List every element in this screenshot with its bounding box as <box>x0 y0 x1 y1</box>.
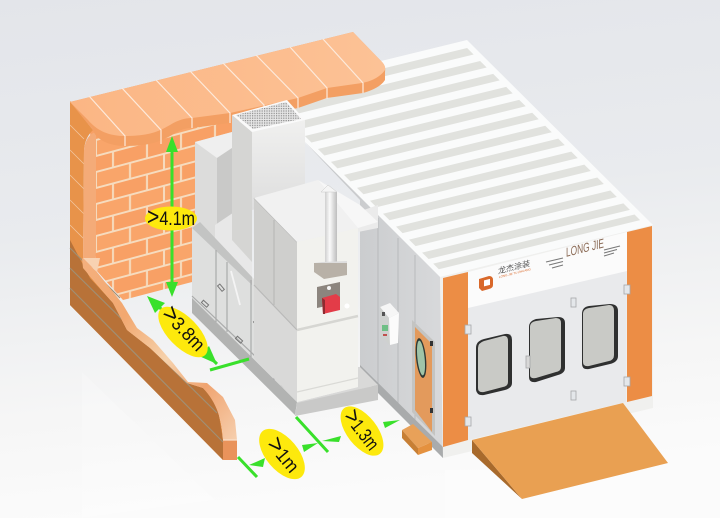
LONG JIE brand: LONG JIE <box>566 236 604 260</box>
red burner <box>322 294 340 314</box>
inner brick face <box>90 110 235 300</box>
control box <box>380 303 399 345</box>
cabinet plinth <box>295 367 378 416</box>
dimension: 1.3m: >1.3m <box>338 403 387 455</box>
pipe base box <box>314 261 347 279</box>
orange right strip <box>627 226 652 402</box>
ramp <box>472 403 668 499</box>
window left <box>476 334 512 395</box>
company logo <box>479 258 531 291</box>
booth front face <box>440 225 653 458</box>
outer wall end <box>70 101 237 460</box>
dimension: 1m: >1m <box>261 431 307 478</box>
LONG JIE brand <box>546 236 620 268</box>
window middle <box>529 317 565 382</box>
booth side wall <box>303 140 443 458</box>
inner return edge <box>83 132 100 272</box>
floor reflections <box>82 372 640 518</box>
dimension: 1.3m <box>322 399 400 463</box>
company logo: LONG JIE TU ZHUANG <box>499 267 531 279</box>
door hinges <box>465 285 630 426</box>
dimension: 1m <box>238 417 328 487</box>
dimension: height 4.1m: >4.1m <box>147 203 195 231</box>
air handling unit <box>192 100 378 416</box>
lower filter cabinet <box>192 222 297 415</box>
dimension: height 4.1m <box>145 136 197 297</box>
brick wall <box>70 101 237 460</box>
rear cabinet <box>195 132 252 285</box>
burner panel <box>317 282 350 314</box>
wooden block <box>402 424 432 455</box>
tall exhaust stack <box>232 100 305 262</box>
exhaust grille <box>236 102 301 129</box>
burner exhaust pipe <box>321 185 337 266</box>
company logo: 龙杰涂装 <box>498 258 530 276</box>
booth side access door <box>412 320 435 436</box>
orange left strip <box>443 272 468 447</box>
window right <box>582 304 618 369</box>
main cabinet <box>254 180 378 416</box>
wall cap <box>70 32 385 146</box>
booth roof <box>254 40 653 277</box>
dimension: 3.8m <box>147 296 249 370</box>
dimension: 3.8m: >3.8m <box>157 300 213 357</box>
curved wall top <box>82 258 237 440</box>
